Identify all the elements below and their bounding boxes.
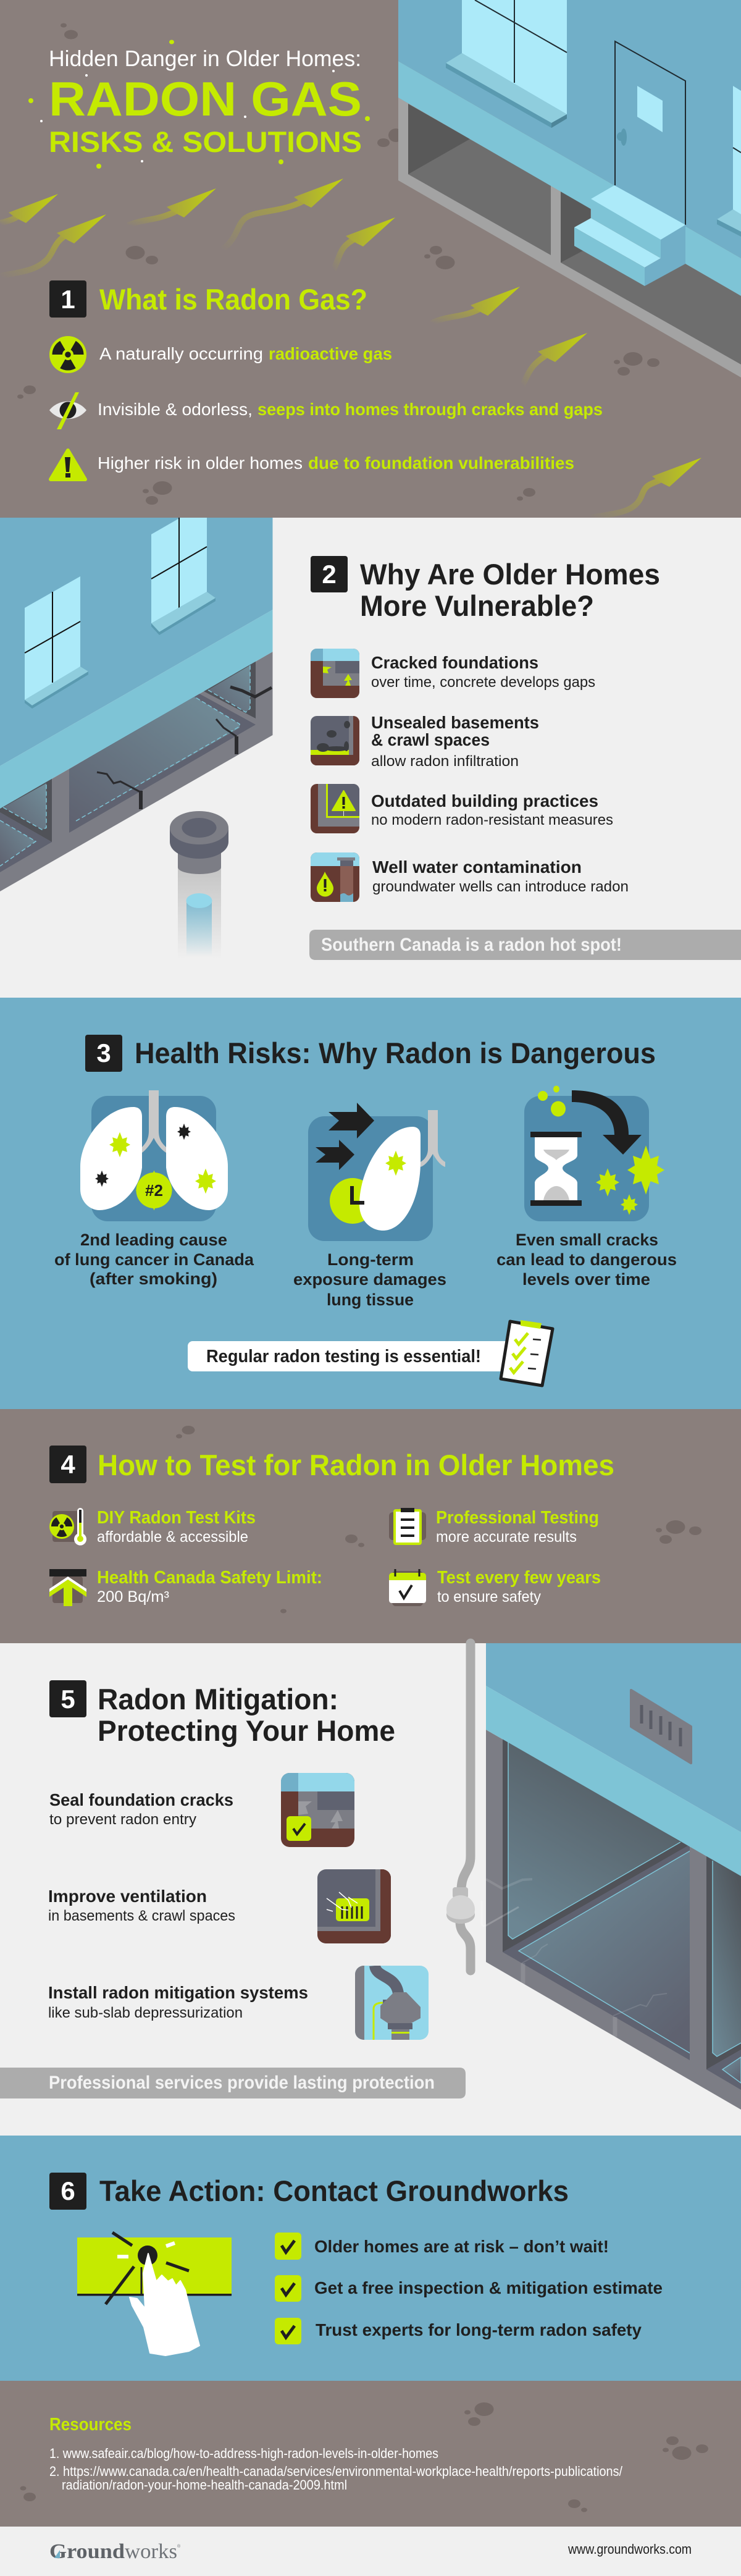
text: even small cracks: can lead to dangerous [496,1250,677,1269]
title: risks and solutions: RISKS & SOLUTIONS [49,125,362,158]
heading: how to test: 4 [61,1450,75,1479]
illustration: foundation with vent and pipe [446,1643,741,2110]
illustration: radon pipe [170,811,228,959]
callout: professional services [0,2068,466,2098]
text: second leading cause: of lung cancer in Canada [54,1250,254,1269]
text: even small cracks: levels over time [522,1270,650,1289]
text: long-term exposure: exposure damages [293,1270,446,1289]
text: long-term exposure: lung tissue [327,1290,414,1309]
icon: sealed crack [281,1773,354,1847]
panel: section 4 how to test [0,1409,741,1643]
panel: section 1 what is radon gas [0,0,741,518]
illustration: house exterior with foundation [398,0,741,377]
text: diy radon test kits: affordable & accessible [97,1528,248,1546]
text: seal foundation cracks: Seal foundation cracks [49,1790,233,1809]
logo: groundworks: works [125,2540,177,2563]
icon: calendar check [389,1569,426,1606]
text: diy radon test kits [97,1508,256,1546]
text: well water contamination [372,857,629,895]
callout: southern canada hot spot [309,930,741,960]
text: cracked foundations: Cracked foundations [371,653,538,672]
icon: radiation with thermometer [49,1508,86,1546]
callout: regular radon testing [188,1341,515,1371]
text: cracked foundations: over time, concrete develops gaps [371,674,595,691]
list item: trust experts: Trust experts for long-term radon safety [316,2320,642,2339]
callout: regular radon testing: Regular radon testing is essential! [206,1347,481,1366]
heading: radon mitigation [49,1680,395,1747]
text: resource links: 2. https://www.canada.ca/en/health-canada/services/environmental-workplace-health/reports-publications/ [49,2464,623,2479]
logo: groundworks: Ground [49,2540,125,2563]
text: second leading cause: (after smoking) [90,1269,217,1288]
text: outdated building practices: Outdated building practices [371,791,598,810]
text: outdated building practices: no modern radon-resistant measures [371,812,613,828]
panel: section 6 take action [0,2136,741,2381]
callout: professional services: Professional services provide lasting protection [49,2073,435,2093]
heading: how to test: How to Test for Radon in Older Homes [98,1449,614,1481]
list item: free inspection: Get a free inspection & mitigation estimate [314,2278,663,2297]
text: health canada safety limit [97,1568,322,1606]
icon: cracked foundations [311,649,359,698]
title: radon gas: RADON GAS [49,72,362,126]
heading: why are older homes more vulnerable [311,556,660,622]
heading: resources: Resources [49,2415,132,2435]
text: naturally occurring: A naturally occurring [99,344,263,363]
text: invisible and odorless: seeps into homes through cracks and gaps [257,400,603,419]
heading: radon mitigation: Protecting Your Home [98,1714,395,1747]
text: professional testing [436,1508,599,1546]
text: improve ventilation [48,1887,235,1924]
heading: health risks: Health Risks: Why Radon is Dangerous [135,1037,656,1069]
text: unsealed basements: allow radon infiltration [371,753,519,770]
text: higher risk: due to foundation vulnerabilities [308,453,574,473]
icon: radiation symbol [49,336,86,373]
text: resource links [49,2446,623,2493]
icon: warning triangle [51,450,85,479]
heading: take action: Take Action: Contact Groundworks [99,2174,569,2207]
icon: sub-slab system [355,1966,429,2040]
panel: footer [0,2527,741,2576]
text: resource links: 1. www.safeair.ca/blog/how-to-address-high-radon-levels-in-older-homes [49,2446,438,2461]
panel: resources [0,2381,741,2527]
text: improve ventilation: in basements & crawl spaces [48,1908,235,1924]
text: install mitigation systems [48,1983,308,2021]
heading: what is radon gas: What is Radon Gas? [99,283,367,316]
text: seal foundation cracks: to prevent radon entry [49,1811,196,1828]
text: higher risk [98,453,574,473]
icon: crossed-out eye [49,392,86,429]
illustration: cracked foundation wall [0,518,273,891]
list item: free inspection [275,2275,663,2302]
text: naturally occurring [99,344,392,363]
icon: well water contamination [311,852,359,902]
text: install mitigation systems: like sub-slab depressurization [48,2005,243,2021]
icon: lungs with number two badge [80,1090,228,1221]
text: install mitigation systems: Install radon mitigation systems [48,1983,308,2002]
icon: unsealed basements [311,716,359,765]
icon: ventilation grille [317,1869,391,1943]
text: second leading cause: 2nd leading cause [80,1231,227,1249]
text: even small cracks [496,1231,677,1289]
icon: hourglass with curved arrow [524,1086,664,1221]
list item: older homes: Older homes are at risk – don’t wait! [314,2237,609,2256]
text: well water contamination: groundwater wells can introduce radon [372,878,629,895]
text: higher risk: Higher risk in older homes [98,453,303,473]
text: health canada safety limit: Health Canada Safety Limit: [97,1568,322,1588]
icon: hand pressing button [77,2233,232,2355]
text: even small cracks: Even small cracks [516,1231,658,1249]
logo: groundworks: ® [177,2544,181,2549]
icon: lung under exposure with clock [308,1103,445,1241]
text: unsealed basements: Unsealed basements [371,713,539,732]
text: invisible and odorless [98,400,603,419]
icon: checklist clipboard [501,1320,553,1386]
text: improve ventilation: Improve ventilation [48,1887,207,1906]
text: test every few years: to ensure safety [437,1588,541,1606]
text: test every few years [437,1568,601,1606]
heading: radon mitigation: Radon Mitigation: [98,1683,338,1715]
text: diy radon test kits: DIY Radon Test Kits [97,1508,256,1528]
list item: older homes [275,2233,609,2260]
icon: lungs with number two badge: #2 [145,1181,163,1200]
list item: trust experts [275,2318,642,2344]
heading: radon mitigation: 5 [61,1685,75,1714]
heading: why are older homes more vulnerable: Why Are Older Homes [360,558,660,591]
text: professional testing: more accurate results [436,1528,577,1546]
logo: groundworks [49,2540,181,2563]
panel: section 5 radon mitigation [0,1643,741,2136]
icon: professional clipboard [389,1508,426,1544]
heading: why are older homes more vulnerable: More Vulnerable? [360,589,594,622]
text: outdated building practices [371,791,613,828]
icon: entry steps [574,185,685,286]
panel: section 2 why older homes are vulnerable [0,518,741,998]
text: resource links: radiation/radon-your-home-health-canada-2009.html [62,2477,347,2493]
panel: section 3 health risks [0,998,741,1409]
icon: safety limit arrow [49,1569,86,1606]
icon: outdated building practices [311,784,359,833]
text: unsealed basements: & crawl spaces [371,730,490,749]
heading: health risks: 3 [96,1038,111,1067]
text: website: www.groundworks.com [567,2541,692,2557]
text: naturally occurring: radioactive gas [269,344,392,363]
text: unsealed basements [371,713,539,770]
text: long-term exposure: Long-term [327,1250,414,1269]
text: test every few years: Test every few years [437,1568,601,1588]
text: second leading cause [54,1231,254,1288]
heading: what is radon gas: 1 [61,285,75,314]
text: long-term exposure [293,1250,446,1309]
text: well water contamination: Well water contamination [372,857,582,877]
heading: take action: 6 [61,2176,75,2205]
text: professional testing: Professional Testing [436,1508,599,1528]
text: invisible and odorless: Invisible & odorless, [98,400,253,419]
text: cracked foundations [371,653,595,691]
title: hidden danger: Hidden Danger in Older Homes: [49,46,361,71]
text: seal foundation cracks [49,1790,233,1828]
heading: why are older homes more vulnerable: 2 [322,560,337,589]
callout: southern canada hot spot: Southern Canada is a radon hot spot! [321,935,622,955]
text: health canada safety limit: 200 Bq/m³ [97,1588,169,1606]
arrows: rising radon gas [0,179,701,518]
